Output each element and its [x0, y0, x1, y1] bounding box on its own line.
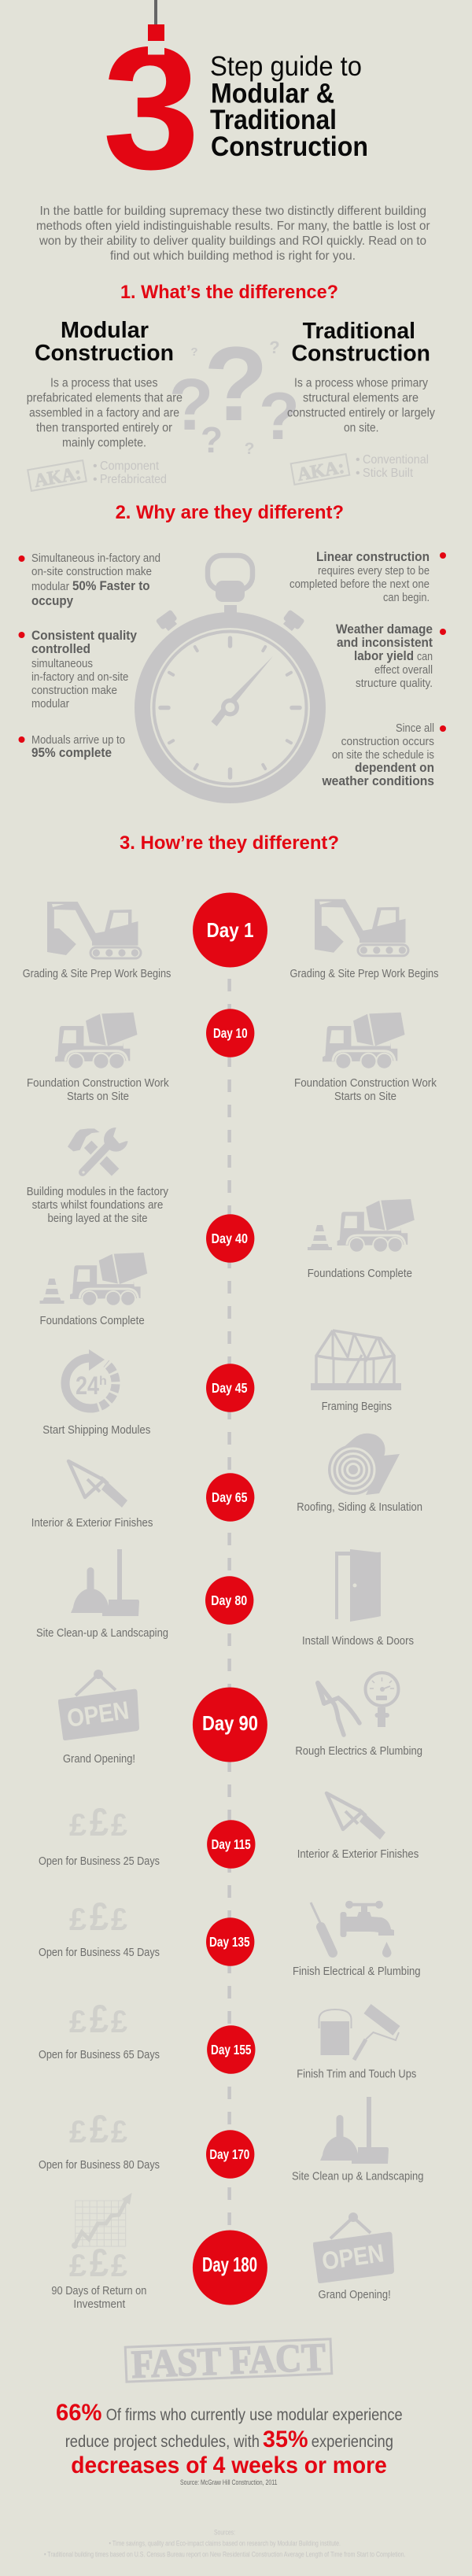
- icon: hammer and wrench: [68, 1125, 134, 1174]
- icon: growth chart with pounds: £: [111, 2249, 127, 2283]
- heading: modular: Construction: [35, 341, 174, 366]
- traditional description: Is a process whose primary: [294, 377, 428, 390]
- icon: open sign traditional: OPEN: [320, 2238, 385, 2275]
- milestone: Day 1: [23, 892, 438, 980]
- intro paragraph: find out which building method is right for you.: [110, 249, 356, 263]
- modular description: Is a process that uses: [50, 377, 158, 390]
- bullet: linear construction: [289, 549, 446, 604]
- intro paragraph: In the battle for building supremacy these two distinctly different building: [39, 205, 426, 218]
- intro paragraph: methods often yield indistinguishable results. For many, the battle is lost or: [36, 220, 430, 233]
- icon: pound signs: [69, 1800, 127, 1844]
- bullet: weather damage: Weather damage: [336, 622, 433, 637]
- icon: pound signs: £: [69, 1902, 87, 1937]
- label: roofing: Roofing, Siding & Insulation: [297, 1501, 422, 1514]
- traditional description: on site.: [344, 422, 379, 435]
- icon: cone and mixer traditional: [308, 1199, 415, 1253]
- icon: open sign modular: OPEN: [65, 1696, 131, 1733]
- panel: traditional reasons: [289, 549, 446, 788]
- icon: trowel modular: [68, 1461, 127, 1508]
- day badge: [193, 2230, 267, 2305]
- label: framing begins: Framing Begins: [322, 1401, 392, 1413]
- milestone: Day 10: [27, 1009, 437, 1103]
- fast fact statement: experiencing: [312, 2433, 393, 2451]
- fast fact statement: [56, 2400, 403, 2478]
- label: modular clean-up: Site Clean-up & Landscaping: [36, 1627, 168, 1640]
- day badge: [193, 1687, 267, 1762]
- milestone: Day 155: [39, 1997, 416, 2081]
- title text: Construction: [211, 131, 368, 162]
- day badge: Day 180: [202, 2253, 257, 2276]
- intro paragraph: won by their ability to deliver quality buildings and ROI quickly. Read on to: [39, 234, 426, 248]
- icon: pound signs: [69, 2107, 127, 2151]
- day badge: Day 45: [212, 1380, 248, 1396]
- milestone: Day 45: [42, 1330, 401, 1437]
- label: modular grand opening: Grand Opening!: [63, 1753, 135, 1766]
- bullet: weather damage: labor yield: [354, 648, 414, 663]
- label: open 65 days: Open for Business 65 Days: [39, 2049, 160, 2061]
- icon: question marks: ?: [201, 419, 223, 460]
- icon: screwdriver and tap: [311, 1901, 394, 1958]
- icon: paint can and roller: [319, 2009, 399, 2060]
- label: modules in factory: [27, 1186, 169, 1225]
- label: modular foundation work: [27, 1077, 169, 1103]
- AKA list: •: [356, 467, 360, 480]
- icon: excavator modular: [47, 902, 141, 958]
- AKA list: Conventional: [363, 453, 429, 467]
- bullet: 95% complete: [19, 734, 125, 760]
- bullet: consistent quality: Consistent quality: [31, 628, 137, 643]
- title text: Traditional: [210, 105, 337, 135]
- label: traditional finishes: Interior & Exterior Finishes: [297, 1848, 419, 1861]
- label: traditional foundation work: Foundation Construction Work: [294, 1077, 437, 1090]
- footer sources: • Time savings, quality and Eco-impact claims based on research by Modular Building institute.: [109, 2540, 341, 2548]
- fast fact statement: 35%: [263, 2427, 308, 2452]
- bullet: weather dependent: weather conditions: [322, 773, 434, 788]
- timeline dashed line: [227, 979, 231, 2227]
- milestone: Day 115: [39, 1793, 419, 1869]
- bullet: weather dependent: [322, 722, 446, 788]
- milestone: Day 65: [31, 1434, 422, 1530]
- title text: [210, 51, 368, 162]
- milestone: Day 40: [39, 1199, 415, 1327]
- bullet: weather damage: effect overall: [374, 664, 433, 677]
- icon: open sign modular: [58, 1670, 139, 1740]
- label: open 80 days: Open for Business 80 Days: [39, 2159, 160, 2172]
- title text: Modular &: [211, 79, 334, 109]
- AKA list: Stick Built: [363, 467, 413, 480]
- intro paragraph: [36, 205, 430, 263]
- milestone: Day 180: [51, 2193, 394, 2311]
- panel: traditional construction: [287, 319, 435, 486]
- icon: pound signs: £: [69, 1808, 87, 1843]
- AKA list: •: [356, 453, 360, 467]
- heading: section 1: 1. What’s the difference?: [120, 282, 338, 303]
- fast fact statement: 66%: [56, 2400, 101, 2426]
- AKA list: •: [93, 473, 98, 486]
- step: building modules in the factory: [27, 1125, 169, 1225]
- label: modules in factory: Building modules in the factory: [27, 1186, 169, 1198]
- heading: section 3: 3. How’re they different?: [120, 832, 339, 854]
- label: windows and doors: Install Windows & Doors: [302, 1635, 414, 1648]
- bullet: weather dependent: dependent on: [355, 760, 434, 775]
- modular description: prefabricated elements that are: [27, 392, 183, 405]
- icon: pound signs: £: [90, 1997, 109, 2041]
- day badge: Day 90: [202, 1711, 258, 1735]
- label: return on investment: 90 Days of Return on: [51, 2285, 146, 2297]
- icon: question marks: ?: [190, 345, 198, 359]
- footer sources: [44, 2529, 406, 2559]
- title text: Step guide to: [210, 51, 362, 82]
- icon: pound signs: £: [111, 1808, 127, 1843]
- AKA list: Prefabricated: [100, 473, 167, 486]
- bullet: consistent quality: construction make: [31, 685, 117, 697]
- icon: question marks: ?: [204, 326, 268, 443]
- icon: pound signs: [69, 1997, 127, 2041]
- label: trim and touch ups: Finish Trim and Touch Ups: [297, 2069, 416, 2081]
- icon: 24h arrow: [65, 1349, 116, 1408]
- label: traditional grading: Grading & Site Prep Work Begins: [289, 968, 439, 980]
- modular description: [27, 377, 183, 450]
- bullet: faster to occupy: [19, 552, 160, 608]
- icon: insulation roll: [328, 1434, 400, 1495]
- label: rough electrics: Rough Electrics & Plumbing: [295, 1745, 422, 1758]
- day badge: Day 115: [212, 1836, 251, 1852]
- label: modules in factory: starts whilst foundations are: [32, 1199, 163, 1212]
- day badge: [206, 1473, 254, 1522]
- bullet: weather dependent: Since all: [396, 722, 434, 735]
- bullet: consistent quality: in-factory and on-site: [31, 671, 128, 684]
- bullet: linear construction: can begin.: [383, 592, 430, 604]
- bullet: faster to occupy: modular: [31, 581, 69, 593]
- icon: pound signs: £: [111, 2115, 127, 2150]
- fast fact statement: reduce project schedules, with: [65, 2433, 260, 2451]
- bullet: faster to occupy: 50% Faster to: [72, 578, 149, 593]
- icon: question marks: [169, 326, 300, 460]
- footer sources: Sources:: [214, 2529, 235, 2537]
- label: return on investment: [51, 2285, 146, 2311]
- icon: stopwatch: [142, 555, 318, 795]
- milestone: Day 90: [58, 1670, 422, 1766]
- bullet: 95% complete: Moduals arrive up to: [31, 734, 125, 747]
- label: finish electrical: Finish Electrical & Plumbing: [293, 1965, 421, 1978]
- bullet: weather damage: can: [417, 651, 433, 663]
- day badge: Day 155: [211, 2042, 252, 2057]
- icon: question marks: ?: [169, 364, 213, 445]
- icon: pound signs: [69, 1895, 127, 1939]
- traditional description: structural elements are: [303, 392, 419, 405]
- day badge: Day 170: [209, 2146, 249, 2162]
- panel: modular construction: [27, 318, 183, 493]
- icon: pound signs: £: [69, 2005, 87, 2039]
- icon: pliers and gauge: [318, 1673, 398, 1735]
- label: traditional grand opening: Grand Opening!: [318, 2289, 391, 2301]
- heading: traditional: Construction: [291, 341, 430, 367]
- icon: pound signs: £: [90, 1800, 109, 1844]
- heading: traditional: Traditional: [303, 319, 415, 344]
- bullet: linear construction: requires every step to be: [318, 565, 430, 578]
- bullet: consistent quality: [19, 628, 137, 710]
- modular description: assembled in a factory and are: [29, 407, 179, 420]
- bullet: linear construction: Linear construction: [316, 549, 430, 564]
- bullet: faster to occupy: occupy: [31, 593, 73, 608]
- label: modular finishes: Interior & Exterior Finishes: [31, 1517, 153, 1530]
- AKA list: •: [93, 459, 98, 473]
- label: open 25 days: Open for Business 25 Days: [39, 1855, 160, 1868]
- icon: growth chart with pounds: £: [69, 2249, 87, 2283]
- day badge: [206, 2130, 254, 2179]
- icon: broom and dustpan traditional: [320, 2097, 389, 2164]
- icon: pound signs: £: [90, 2107, 109, 2151]
- icon: cement mixer traditional: [323, 1013, 404, 1070]
- label: modules in factory: being layed at the site: [47, 1212, 148, 1225]
- label: modular foundation work: Starts on Site: [67, 1091, 129, 1103]
- icon: growth chart with pounds: [69, 2193, 132, 2285]
- bullet: faster to occupy: on-site construction make: [31, 566, 152, 578]
- modular description: mainly complete.: [62, 437, 146, 450]
- icon: pound signs: £: [111, 2005, 127, 2039]
- AKA list: Component: [100, 459, 160, 473]
- label: return on investment: Investment: [73, 2298, 125, 2311]
- AKA stamp: AKA:: [33, 463, 83, 492]
- heading: traditional: [291, 319, 430, 367]
- day badge: Day 1: [206, 918, 253, 942]
- day badge: [206, 1917, 254, 1966]
- fast fact stamp: FAST FACT: [131, 2334, 326, 2386]
- icon: cone and mixer modular: [39, 1253, 147, 1307]
- label: modular foundations complete: Foundations Complete: [39, 1315, 145, 1327]
- bullet: 95% complete: 95% complete: [31, 745, 112, 760]
- heading: modular: [35, 318, 174, 366]
- day badge: [207, 1820, 255, 1869]
- day badge: [207, 2025, 255, 2074]
- icon: question marks: ?: [245, 440, 254, 458]
- traditional description: [287, 377, 435, 435]
- icon: open sign traditional: [313, 2212, 394, 2283]
- day badge: Day 40: [212, 1231, 248, 1246]
- icon: pound signs: £: [111, 1902, 127, 1937]
- traditional description: constructed entirely or largely: [287, 407, 435, 420]
- icon: question marks: ?: [259, 379, 300, 454]
- label: traditional foundation work: Starts on Site: [334, 1091, 396, 1103]
- bullet: faster to occupy: Simultaneous in-factory and: [31, 552, 160, 565]
- bullet: weather damage: and inconsistent: [337, 635, 433, 650]
- icon: trowel traditional: [326, 1793, 385, 1840]
- label: traditional foundations complete: Foundations Complete: [308, 1268, 412, 1280]
- day badge: [206, 1214, 254, 1263]
- icon: timber frame: [311, 1330, 401, 1390]
- bullet: linear construction: completed before the next one: [289, 578, 430, 591]
- day badge: Day 65: [212, 1489, 248, 1505]
- bullet: weather dependent: construction occurs: [341, 736, 434, 748]
- big red numeral 3 hanging from a cord: 3: [102, 11, 200, 206]
- day badge: Day 135: [209, 1934, 250, 1950]
- icon: door: [335, 1549, 381, 1622]
- bullet: consistent quality: modular: [31, 698, 69, 710]
- icon: pound signs: £: [90, 1895, 109, 1939]
- fast fact statement: decreases of 4 weeks or more: [71, 2452, 387, 2478]
- AKA stamp: AKA:: [296, 457, 346, 485]
- label: start shipping: Start Shipping Modules: [42, 1424, 150, 1437]
- icon: excavator traditional: [315, 899, 408, 956]
- day badge: [206, 1364, 254, 1412]
- bullet: weather damage: structure quality.: [356, 677, 433, 690]
- icon: pound signs: £: [69, 2115, 87, 2150]
- icon: cement mixer modular: [55, 1013, 137, 1070]
- label: open 45 days: Open for Business 45 Days: [39, 1947, 160, 1959]
- AKA list: [356, 453, 429, 480]
- icon: 24h arrow: h: [99, 1375, 107, 1388]
- icon: growth chart with pounds: £: [90, 2241, 109, 2285]
- milestone: Day 170: [39, 2097, 423, 2183]
- milestone: Day 135: [39, 1895, 421, 1978]
- panel: modular reasons: [19, 552, 160, 760]
- title block: [102, 0, 368, 206]
- heading: section 2: 2. Why are they different?: [116, 502, 344, 523]
- day badge: Day 80: [211, 1592, 247, 1608]
- modular description: then transported entirely or: [36, 422, 172, 435]
- heading: modular: Modular: [61, 318, 149, 343]
- bullet: weather dependent: on site the schedule is: [332, 749, 434, 762]
- day badge: [205, 1576, 253, 1625]
- label: modular grading: Grading & Site Prep Work Begins: [23, 968, 171, 980]
- icon: 24h arrow: 24: [76, 1371, 99, 1400]
- bullet: consistent quality: simultaneous: [31, 658, 93, 670]
- bullet: weather damage: [336, 622, 446, 690]
- fast fact statement: Of firms who currently use modular experience: [106, 2406, 403, 2424]
- day badge: Day 10: [213, 1025, 248, 1041]
- day badge: [193, 892, 267, 968]
- icon: broom and dustpan modular: [71, 1549, 139, 1616]
- label: traditional clean up: Site Clean up & Landscaping: [292, 2171, 423, 2183]
- milestone: Day 80: [36, 1549, 414, 1648]
- day badge: [206, 1009, 254, 1057]
- AKA list: [93, 459, 167, 486]
- label: traditional foundation work: [294, 1077, 437, 1103]
- label: modular foundation work: Foundation Construction Work: [27, 1077, 169, 1090]
- icon: question marks: ?: [269, 338, 280, 357]
- bullet: consistent quality: controlled: [31, 641, 90, 656]
- fast fact source: Source: McGraw Hill Construction, 2011: [180, 2478, 277, 2486]
